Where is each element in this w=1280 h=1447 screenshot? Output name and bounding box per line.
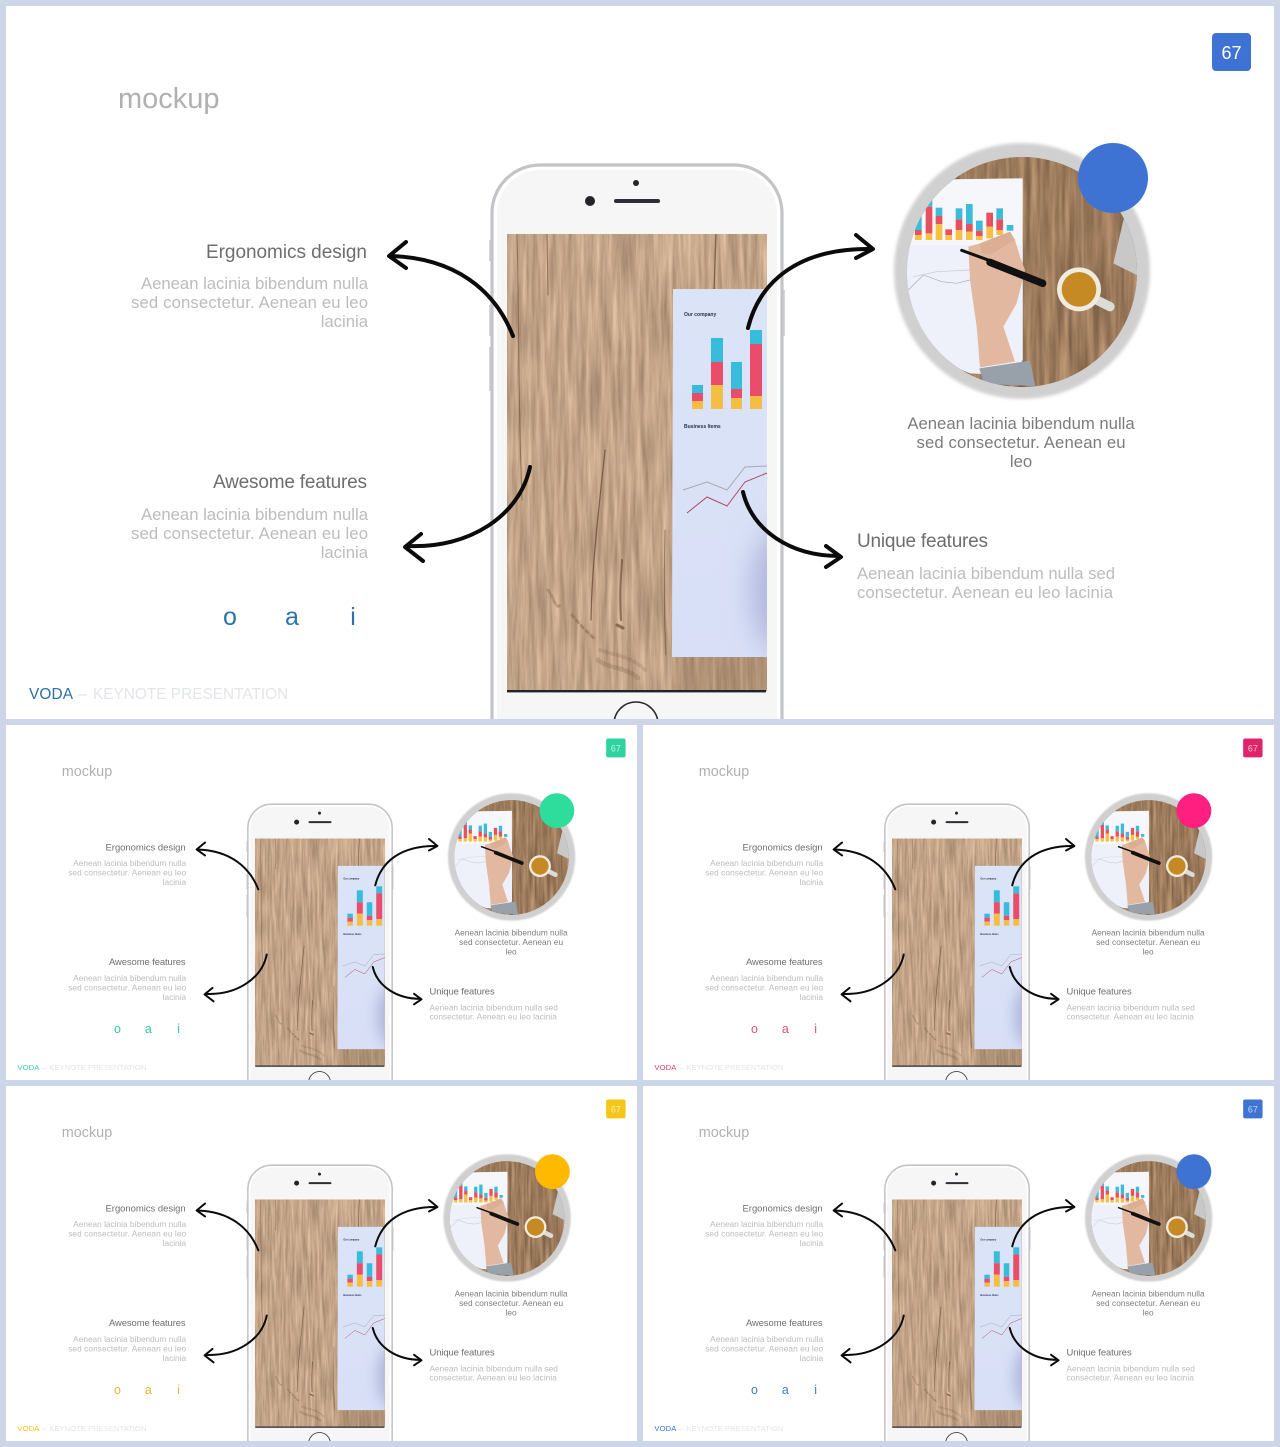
circular photo with dot [443,1154,576,1282]
text block: awesome features: Aenean lacinia bibendum nulla [141,505,369,524]
text block: unique features: Aenean lacinia bibendum nulla sed [1066,1002,1195,1012]
text block: unique features: Unique features [1066,1347,1132,1358]
photo caption: leo [1143,1308,1154,1318]
footer: VODA [654,1424,677,1433]
photo caption: leo [506,1308,517,1318]
text block: awesome features: lacinia [163,992,187,1002]
photo caption: Aenean lacinia bibendum nulla [1092,1289,1205,1299]
text block: ergonomics design: Aenean lacinia bibendum nulla [710,858,824,868]
text block: awesome features: Aenean lacinia bibendum nulla [710,973,824,983]
letters o a i: i [814,1022,817,1036]
text block: unique features: Aenean lacinia bibendum nulla sed [429,1363,558,1373]
text block: awesome features: sed consectetur. Aenean eu leo [68,982,187,992]
letters o a i: o [114,1022,121,1036]
slide background [6,1086,637,1441]
arrow to awesome features [405,467,530,561]
arrow to circular photo [1012,839,1074,885]
footer: VODA [654,1063,677,1072]
text block: ergonomics design [705,842,824,887]
page number badge [1243,738,1263,757]
footer: VODA [29,686,74,703]
text block: unique features: Unique features [429,986,495,997]
letters o a i: a [285,603,299,631]
photo caption: Aenean lacinia bibendum nulla [455,928,568,938]
arrow to ergonomics design [197,1204,258,1250]
chart labels on phone screen: Our company [980,1238,997,1241]
text block: awesome features [68,957,187,1002]
photo caption: leo [1143,947,1154,957]
text block: unique features [1066,986,1195,1022]
chart labels on phone screen: Our company [343,877,360,880]
photo caption [907,414,1135,471]
text block: ergonomics design: sed consectetur. Aenean eu leo [68,867,187,877]
circular photo with dot [1085,1154,1217,1282]
footer: KEYNOTE PRESENTATION [49,1424,146,1433]
arrow to unique features [1010,967,1059,1004]
circular photo with dot [1085,793,1217,921]
photo caption [455,1289,568,1318]
arrow to awesome features [205,1316,267,1362]
page number badge: 67 [1221,43,1242,63]
arrow to unique features [373,967,422,1004]
letters o a i: a [145,1383,152,1397]
chart labels on phone screen [343,877,362,936]
photo caption [1092,1289,1205,1318]
text block: unique features: consectetur. Aenean eu leo lacinia [429,1012,557,1022]
text block: awesome features [705,957,824,1002]
text block: unique features: Unique features [857,531,988,552]
text block: ergonomics design [68,842,187,887]
slide background [6,725,637,1080]
text block: ergonomics design [705,1203,824,1248]
text block: ergonomics design: lacinia [800,1238,824,1248]
arrow to unique features [743,492,841,567]
text block: unique features: consectetur. Aenean eu leo lacinia [1066,1012,1194,1022]
page number badge [606,1099,626,1118]
chart labels on phone screen: Business Items [343,1294,362,1297]
title: mockup [62,764,112,780]
chart labels on phone screen [343,1238,362,1297]
chart labels on phone screen: Business Items [980,1294,999,1297]
photo caption: Aenean lacinia bibendum nulla [1092,928,1205,938]
footer: KEYNOTE PRESENTATION [49,1063,146,1072]
letters o a i: o [114,1383,121,1397]
photo caption [455,928,568,957]
text block: ergonomics design: Ergonomics design [106,842,186,853]
letters o a i: i [177,1022,180,1036]
chart labels on phone screen: Our company [980,877,997,880]
text block: ergonomics design: lacinia [321,312,369,331]
text block: awesome features: Awesome features [109,957,186,968]
arrow to circular photo [1012,1200,1074,1246]
text block: awesome features: Awesome features [213,472,367,493]
arrow to circular photo [375,1200,437,1246]
letters o a i: a [782,1022,789,1036]
footer: KEYNOTE PRESENTATION [686,1424,783,1433]
text block: ergonomics design [131,242,369,331]
photo caption: Aenean lacinia bibendum nulla [455,1289,568,1299]
footer: VODA [17,1424,40,1433]
text block: awesome features: sed consectetur. Aenean eu leo [131,524,368,543]
text block: awesome features [705,1318,824,1363]
chart labels on phone screen [980,877,999,936]
text block: awesome features [131,472,369,562]
text block: unique features: Aenean lacinia bibendum nulla sed [857,564,1115,583]
text block: unique features: Aenean lacinia bibendum nulla sed [1066,1363,1195,1373]
photo caption: sed consectetur. Aenean eu [459,1298,563,1308]
slide background [643,725,1274,1080]
page number badge: 67 [611,1104,621,1114]
page number badge [606,738,626,757]
arrow to circular photo [375,839,437,885]
text block: unique features [857,531,1115,602]
slide background [6,6,1274,719]
text block: unique features: Unique features [1066,986,1132,997]
phone mockup [246,1165,407,1447]
text block: ergonomics design: sed consectetur. Aenean eu leo [705,1228,824,1238]
title: mockup [118,83,220,115]
arrow to circular photo [748,235,873,328]
footer: – [679,1424,684,1433]
text block: unique features: Unique features [429,1347,495,1358]
footer: – [42,1424,47,1433]
text block: awesome features: Aenean lacinia bibendum nulla [73,973,187,983]
chart labels on phone screen: Our company [343,1238,360,1241]
circular photo with dot [894,143,1160,399]
arrow to ergonomics design [834,1204,895,1250]
text block: ergonomics design: Ergonomics design [206,242,367,263]
chart labels on phone screen: Business Items [980,933,999,936]
photo caption: sed consectetur. Aenean eu [1096,1298,1200,1308]
footer: – [78,686,87,703]
text block: awesome features: lacinia [163,1353,187,1363]
letters o a i [114,1383,180,1397]
phone mockup [489,165,812,865]
letters o a i [751,1383,817,1397]
text block: ergonomics design: sed consectetur. Aenean eu leo [68,1228,187,1238]
text block: awesome features: lacinia [800,992,824,1002]
title: mockup [699,764,749,780]
letters o a i: i [814,1383,817,1397]
text block: ergonomics design: Aenean lacinia bibendum nulla [73,858,187,868]
photo caption: leo [506,947,517,957]
text block: awesome features: sed consectetur. Aenean eu leo [705,1343,824,1353]
letters o a i: o [751,1383,758,1397]
phone mockup [883,1165,1044,1447]
letters o a i: i [350,603,356,631]
text block: ergonomics design: Ergonomics design [743,842,823,853]
phone mockup [246,804,407,1153]
text block: ergonomics design: lacinia [800,877,824,887]
letters o a i: o [751,1022,758,1036]
text block: unique features: consectetur. Aenean eu leo lacinia [1066,1373,1194,1383]
arrow to awesome features [842,1316,904,1362]
text block: unique features: Aenean lacinia bibendum nulla sed [429,1002,558,1012]
text block: unique features: consectetur. Aenean eu leo lacinia [429,1373,557,1383]
chart labels on phone screen [684,312,721,430]
panel: main slide blue [6,6,1274,719]
photo caption [1092,928,1205,957]
chart labels on phone screen: Business Items [684,424,721,430]
footer: VODA [17,1063,40,1072]
text block: awesome features: sed consectetur. Aenean eu leo [68,1343,187,1353]
text block: ergonomics design [68,1203,187,1248]
panel: slide green [6,725,637,1080]
text block: awesome features: Awesome features [746,957,823,968]
arrow to ergonomics design [197,843,258,889]
text block: awesome features: Aenean lacinia bibendum nulla [73,1334,187,1344]
letters o a i: i [177,1383,180,1397]
text block: ergonomics design: sed consectetur. Aenean eu leo [131,293,368,312]
text block: awesome features: Awesome features [109,1318,186,1329]
arrow to awesome features [205,955,267,1001]
text block: ergonomics design: Aenean lacinia bibendum nulla [710,1219,824,1229]
panel: slide yellow [6,1086,637,1441]
letters o a i [223,603,356,631]
text block: unique features [429,986,558,1022]
letters o a i: o [223,603,237,631]
text block: ergonomics design: lacinia [163,877,187,887]
text block: unique features: consectetur. Aenean eu leo lacinia [857,583,1114,602]
footer: – [42,1063,47,1072]
arrow to ergonomics design [389,242,513,336]
phone mockup [883,804,1044,1153]
footer: KEYNOTE PRESENTATION [686,1063,783,1072]
chart labels on phone screen: Our company [684,312,716,318]
text block: awesome features: Aenean lacinia bibendum nulla [710,1334,824,1344]
photo caption: sed consectetur. Aenean eu [459,937,563,947]
page number badge [1243,1099,1263,1118]
letters o a i [751,1022,817,1036]
footer: KEYNOTE PRESENTATION [93,686,288,703]
letters o a i [114,1022,180,1036]
footer: – [679,1063,684,1072]
text block: unique features [1066,1347,1195,1383]
photo caption: Aenean lacinia bibendum nulla [907,414,1135,433]
letters o a i: a [782,1383,789,1397]
text block: awesome features [68,1318,187,1363]
text block: ergonomics design: Aenean lacinia bibendum nulla [73,1219,187,1229]
photo caption: sed consectetur. Aenean eu [1096,937,1200,947]
page number badge: 67 [611,743,621,753]
arrow to awesome features [842,955,904,1001]
text block: ergonomics design: lacinia [163,1238,187,1248]
text block: awesome features: lacinia [800,1353,824,1363]
page number badge: 67 [1248,1104,1258,1114]
panel: slide blue small [643,1086,1274,1441]
photo caption: leo [1010,452,1032,471]
chart labels on phone screen: Business Items [343,933,362,936]
title: mockup [699,1125,749,1141]
letters o a i: a [145,1022,152,1036]
photo caption: sed consectetur. Aenean eu [916,433,1126,452]
text block: ergonomics design: sed consectetur. Aenean eu leo [705,867,824,877]
circular photo with dot [448,793,580,921]
text block: ergonomics design: Ergonomics design [743,1203,823,1214]
panel: slide pink [643,725,1274,1080]
text block: ergonomics design: Ergonomics design [106,1203,186,1214]
arrow to ergonomics design [834,843,895,889]
arrow to unique features [1010,1328,1059,1365]
slide background [643,1086,1274,1441]
page number badge [1212,33,1251,71]
arrow to unique features [373,1328,422,1365]
title: mockup [62,1125,112,1141]
chart labels on phone screen [980,1238,999,1297]
text block: unique features [429,1347,558,1383]
text block: awesome features: lacinia [321,543,369,562]
text block: awesome features: Awesome features [746,1318,823,1329]
text block: awesome features: sed consectetur. Aenean eu leo [705,982,824,992]
page number badge: 67 [1248,743,1258,753]
text block: ergonomics design: Aenean lacinia bibendum nulla [141,274,369,293]
